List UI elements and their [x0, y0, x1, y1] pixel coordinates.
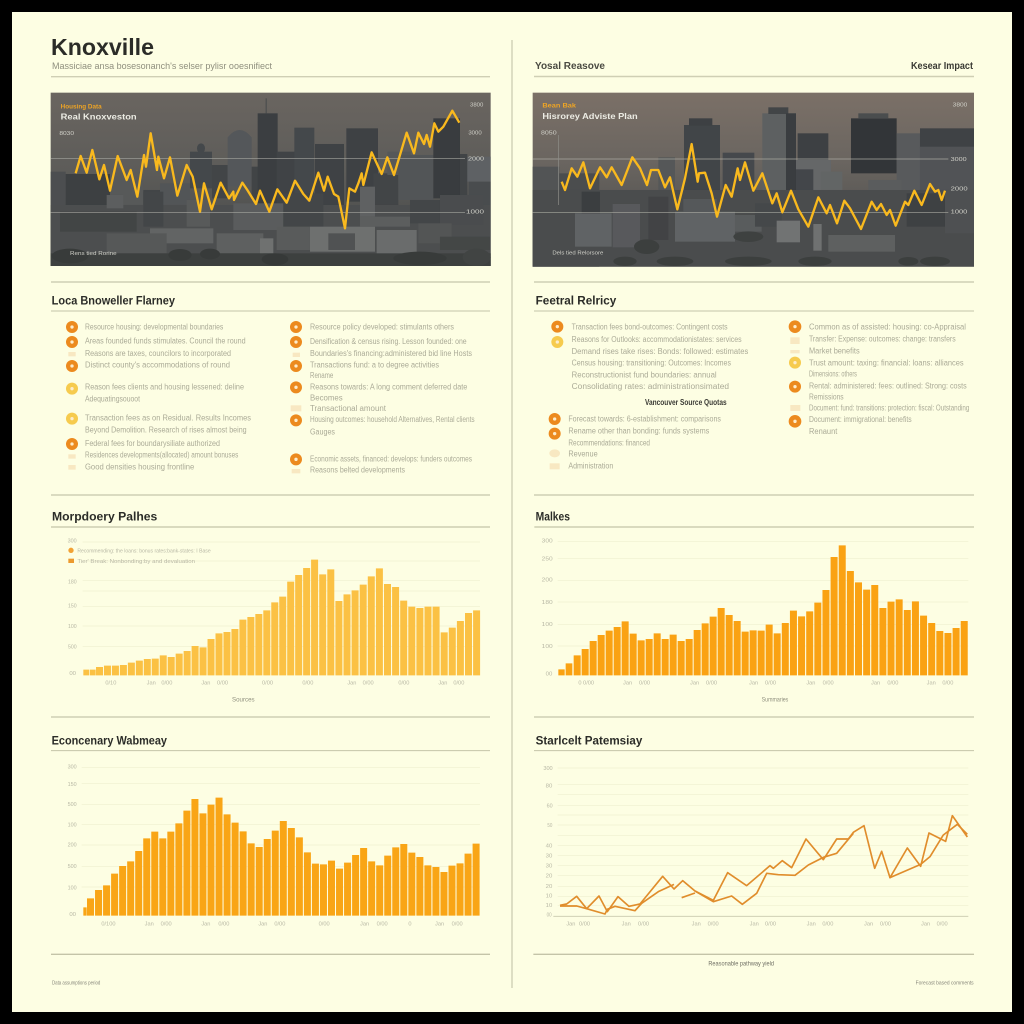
- legend: Tier' Break: Nonbonding:by and devaluation: [77, 559, 195, 565]
- bar chart: [83, 798, 480, 916]
- panel axis labels: 1000: [466, 210, 484, 216]
- panel axis labels: Dels tied Relorsore: [552, 251, 603, 257]
- panel: monetary pathways chart: [51, 511, 490, 703]
- list column one: Beyond Demolition. Research of rises almost being: [85, 425, 247, 434]
- list column two: Transactional amount: [310, 404, 387, 413]
- bar chart: [558, 545, 968, 675]
- panel axis labels: 2000: [468, 156, 484, 162]
- list column one: Adequatingsouoot: [85, 394, 141, 403]
- panel: local policy list: [51, 294, 490, 475]
- axis labels: [68, 539, 464, 703]
- skyline: [51, 98, 491, 266]
- list column two: Trust amount: taxing: financial: loans: alliances: [809, 358, 964, 367]
- panel kicker: Bean Bak: [542, 103, 576, 110]
- panel axis labels: 1000: [951, 209, 967, 215]
- list column two: Transactions fund: a to degree activities: [310, 361, 439, 370]
- axis labels: 0/00: [262, 681, 273, 687]
- axis labels: 150: [68, 604, 77, 610]
- panel: markets chart: [534, 511, 974, 703]
- axis labels: 0/00: [942, 681, 953, 687]
- axis labels: 100: [68, 822, 77, 828]
- legend: Recommending: the loans: bonus rates:bank-states: I Base: [77, 548, 211, 554]
- axis labels: 0/00: [880, 921, 891, 927]
- list column two: Rename: [310, 371, 334, 380]
- list column one: Forecast towards: 6-establishment: comparisons: [568, 415, 721, 424]
- list column one: Demand rises take rises: Bonds: followed: estimates: [572, 347, 748, 356]
- list column two: Document: immigrational: benefits: [809, 415, 912, 424]
- axis labels: Jan: [201, 681, 210, 687]
- axis labels: Jan: [806, 681, 815, 687]
- axis labels: 0/00: [765, 921, 776, 927]
- panel heading: Hisrorey Adviste Plan: [542, 111, 638, 121]
- panel axis labels: 3000: [468, 130, 482, 136]
- axis labels: Jan: [145, 921, 154, 927]
- axis labels: 10: [546, 893, 552, 899]
- axis labels: Jan: [623, 681, 632, 687]
- axis labels: 00: [546, 671, 552, 677]
- axis labels: 0 0/00: [578, 681, 594, 687]
- list column one: Administration: [568, 462, 613, 471]
- list column one: Federal fees for boundarysiliate authorized: [85, 439, 220, 448]
- axis labels: 0/00: [398, 681, 409, 687]
- axis labels: 0/00: [639, 681, 650, 687]
- list column two: Reasons belted developments: [310, 466, 405, 475]
- axis labels: 0/00: [377, 921, 388, 927]
- list column two: Economic assets, financed: develops: funders outcomes: [310, 454, 472, 463]
- axis labels: Jan: [201, 921, 210, 927]
- axis labels: 0/00: [765, 681, 776, 687]
- panel heading: Real Knoxveston: [61, 111, 137, 121]
- axis labels: 100: [68, 886, 77, 892]
- panel axis labels: 2000: [951, 186, 968, 192]
- list column one: Rename other than bonding: funds systems: [568, 427, 709, 436]
- axis labels: 500: [68, 645, 77, 651]
- axis labels: 0/00: [453, 681, 464, 687]
- list column one: Reasons for Outlooks: accommodationistates: services: [572, 335, 742, 344]
- panel kicker: Housing Data: [61, 103, 102, 110]
- list column two: Remissions: [809, 392, 844, 401]
- axis labels: 0: [408, 921, 411, 927]
- list column one: Good densities housing frontline: [85, 463, 195, 472]
- top right right label: Kesear Impact: [911, 61, 974, 72]
- panel axis labels: 8030: [59, 131, 74, 137]
- axis labels: Jan: [622, 921, 631, 927]
- heading: Starlcelt Patemsiay: [536, 734, 643, 747]
- axis labels: 0/00: [823, 681, 834, 687]
- axis labels: Jan: [749, 681, 758, 687]
- chart caption: Reasonable pathway yield: [708, 962, 774, 968]
- legend: [68, 548, 211, 565]
- list column two: Renaunt: [809, 427, 838, 436]
- axis labels: 0/00: [274, 921, 285, 927]
- list column two: Gauges: [310, 427, 335, 436]
- list column two: Housing outcomes: household Alternatives, Rental clients: [310, 415, 475, 424]
- list column one: Recommendations: financed: [568, 438, 650, 447]
- panel axis labels: [59, 102, 484, 257]
- axis labels: 200: [542, 577, 553, 583]
- axis labels: Jan: [438, 681, 447, 687]
- axis labels: Summaries: [762, 697, 788, 703]
- axis labels: Jan: [927, 681, 936, 687]
- list column two: Boundaries's financing:administered bid line Hosts: [310, 349, 472, 358]
- panel: economy pathway chart: [51, 734, 490, 986]
- bar chart: [83, 560, 480, 675]
- list column one: Distinct county's accommodations of round: [85, 361, 230, 370]
- axis labels: 300: [543, 766, 553, 772]
- line chart: [560, 816, 967, 914]
- axis labels: 60: [547, 803, 553, 809]
- list column one: [549, 321, 748, 471]
- yellow line chart: [562, 144, 945, 229]
- axis labels: 0/10: [105, 681, 116, 687]
- panel axis labels: 8050: [541, 131, 557, 137]
- axis labels: Jan: [258, 921, 267, 927]
- axis labels: Jan: [807, 921, 816, 927]
- axis labels: [68, 764, 463, 927]
- axis labels: 100: [542, 644, 553, 650]
- title: Knoxville: [51, 34, 154, 60]
- list column two: Resource policy developed: stimulants others: [310, 323, 454, 332]
- list column one: Consolidating rates: administrationsimated: [572, 382, 729, 391]
- axis labels: 0/00: [218, 921, 229, 927]
- list column two: Densification & census rising. Lesson founded: one: [310, 337, 467, 346]
- subtitle: Massiciae ansa bosesonanch's selser pylisr ooesnifiect: [52, 61, 272, 72]
- list column two: Reasons towards: A long comment deferred date: [310, 382, 468, 391]
- axis labels: 0/00: [452, 921, 463, 927]
- axis labels: 00: [547, 913, 552, 919]
- list column one: Resource housing: developmental boundaries: [85, 323, 223, 332]
- axis labels: Sources: [232, 697, 255, 703]
- axis labels: 0/100: [101, 921, 115, 927]
- panel: federal policy list: [534, 294, 974, 471]
- axis labels: [542, 539, 953, 703]
- panel: student pathway line chart: [533, 734, 974, 986]
- axis labels: 80: [546, 783, 552, 789]
- axis labels: 180: [542, 600, 553, 606]
- axis labels: 250: [542, 557, 553, 563]
- axis labels: 30: [546, 853, 552, 859]
- axis labels: 10: [546, 903, 552, 909]
- axis labels: 300: [68, 764, 77, 770]
- axis labels: 50: [547, 823, 552, 829]
- axis labels: 0/00: [161, 921, 172, 927]
- axis labels: 00: [69, 671, 76, 677]
- axis labels: 500: [68, 802, 77, 808]
- list column two: Becomes: [310, 393, 343, 402]
- list column one: Transaction fees bond-outcomes: Contingent costs: [572, 322, 728, 331]
- panel axis labels: 3800: [953, 102, 967, 108]
- list column two: Common as of assisted: housing: co-Appraisal: [809, 322, 966, 331]
- axis labels: 0/00: [822, 921, 833, 927]
- list column one: Transaction fees as on Residual. Results Incomes: [85, 414, 251, 423]
- axis labels: 100: [68, 624, 77, 630]
- axis labels: Jan: [921, 921, 930, 927]
- panel axis labels: Rens tied Rorine: [70, 251, 117, 257]
- heading: Morpdoery Palhes: [52, 511, 157, 524]
- list column two: Document: fund: transitions: protection: fiscal: Outstanding: [809, 404, 969, 413]
- axis labels: 0/00: [579, 921, 590, 927]
- axis labels: Jan: [360, 921, 369, 927]
- list column two: Dimensions: others: [809, 370, 857, 379]
- list column one: Reconstructionist fund boundaries: annual: [572, 370, 717, 379]
- top right left label: Yosal Reasove: [535, 61, 605, 72]
- axis labels: 0/00: [708, 921, 719, 927]
- panel axis labels: 3800: [470, 102, 483, 108]
- axis labels: 0/00: [638, 921, 649, 927]
- list column one: Revenue: [568, 450, 598, 459]
- panel: Knoxville skyline with line chart: [51, 93, 491, 266]
- axis labels: 0/00: [217, 681, 228, 687]
- axis labels: 0/00: [302, 681, 313, 687]
- list column one: Reasons are taxes, councilors to incorporated: [85, 349, 231, 358]
- list column two: Transfer: Expense: outcomes: change: transfers: [809, 335, 956, 344]
- axis labels: 100: [542, 622, 553, 628]
- axis labels: Jan: [435, 921, 444, 927]
- heading: Loca Bnoweller Flarney: [52, 294, 175, 307]
- axis labels: Jan: [690, 681, 699, 687]
- source note: Forecast based comments: [916, 980, 974, 986]
- axis labels: 300: [542, 539, 553, 545]
- axis labels: 0/00: [887, 681, 898, 687]
- axis labels: Jan: [750, 921, 759, 927]
- axis labels: 0/00: [937, 921, 948, 927]
- axis labels: 40: [546, 843, 552, 849]
- list column two: [290, 321, 475, 475]
- axis labels: 150: [68, 782, 77, 788]
- axis labels: 20: [546, 873, 552, 879]
- axis labels: 0/00: [319, 921, 330, 927]
- axis labels: 500: [68, 864, 77, 870]
- panel axis labels: [541, 102, 968, 257]
- axis labels: Jan: [692, 921, 701, 927]
- source note: Data assumptions period: [52, 980, 100, 986]
- heading: Feetral Relricy: [536, 294, 617, 307]
- yellow line chart: [76, 111, 459, 228]
- axis labels: Jan: [147, 681, 156, 687]
- axis labels: 180: [68, 579, 77, 585]
- axis labels: 30: [546, 863, 552, 869]
- panel axis labels: 3000: [951, 157, 967, 163]
- axis labels: [543, 766, 948, 927]
- axis labels: 0/00: [706, 681, 717, 687]
- panel: policy skyline with line chart: [533, 93, 974, 267]
- list column two: [789, 320, 969, 436]
- list column two: Rental: administered: fees: outlined: Strong: costs: [809, 382, 967, 391]
- axis labels: Jan: [566, 921, 575, 927]
- list column two: Market benefits: [809, 346, 860, 355]
- axis labels: 200: [68, 843, 77, 849]
- centered subheading: Vancouver Source Quotas: [645, 398, 727, 407]
- axis labels: Jan: [864, 921, 873, 927]
- axis labels: 00: [69, 912, 76, 918]
- axis labels: 300: [68, 539, 77, 545]
- axis labels: 0/00: [161, 681, 172, 687]
- list column one: Reason fees clients and housing lessened: deline: [85, 382, 244, 391]
- axis labels: Jan: [871, 681, 880, 687]
- list column one: Areas founded funds stimulates. Council the round: [85, 337, 246, 346]
- axis labels: Jan: [347, 681, 356, 687]
- axis labels: 20: [546, 884, 552, 890]
- list column one: Residences developments(allocated) amount bonuses: [85, 451, 238, 460]
- heading: Malkes: [536, 511, 570, 524]
- skyline: [533, 107, 974, 267]
- axis labels: 0/00: [363, 681, 374, 687]
- list column one: Census housing: transitioning: Outcomes: Incomes: [572, 359, 731, 368]
- list column one: [66, 321, 251, 472]
- heading: Econcenary Wabmeay: [52, 734, 167, 747]
